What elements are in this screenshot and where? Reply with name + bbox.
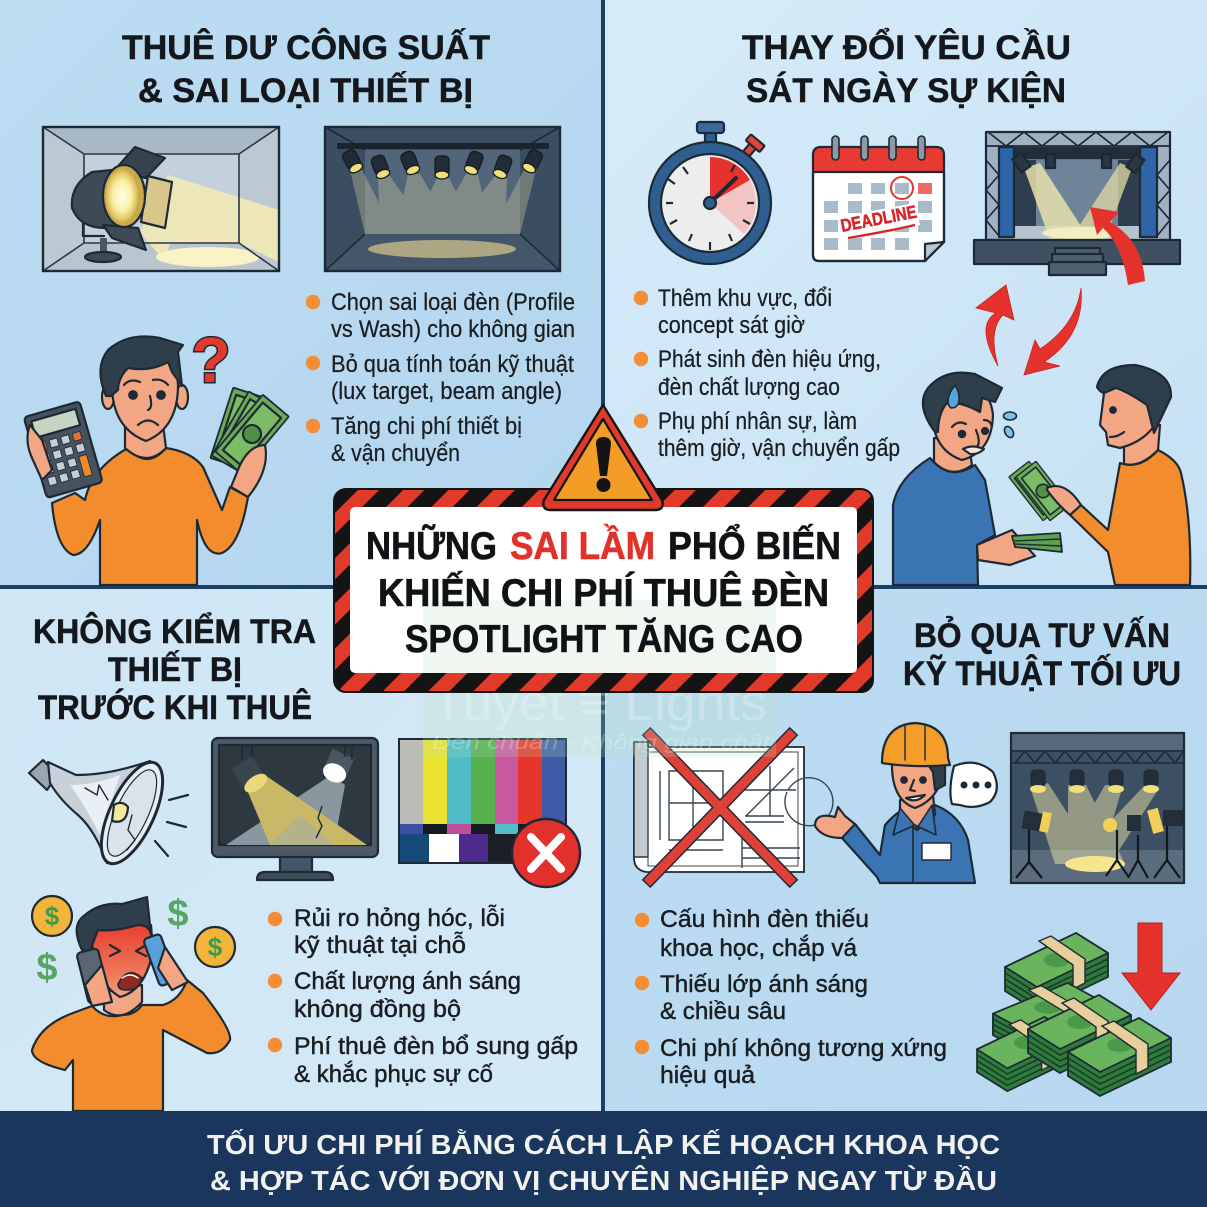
icon: single spotlight in room	[43, 127, 279, 271]
illustration: stressed man on two phones with coins: $	[167, 893, 189, 935]
heading: bottom left: KHÔNG KIỂM TRA	[33, 612, 316, 651]
icon: monitor with mismatched beams	[212, 738, 378, 880]
title text: KHIẾN CHI PHÍ THUÊ ĐÈN	[378, 571, 829, 615]
panel: oversized equipment background	[0, 0, 604, 588]
title text: PHỔ BIẾN	[668, 523, 841, 568]
bullets: bottom right: Cấu hình đèn thiếu	[660, 906, 869, 933]
bullets: top right: Phụ phí nhân sự, làm	[658, 408, 857, 435]
icon: stopwatch	[649, 122, 771, 264]
title text: NHỮNG	[366, 524, 497, 568]
illustration: worried client hands over money	[893, 365, 1190, 585]
arrow: up left	[976, 285, 1014, 366]
white title box	[350, 507, 857, 673]
illustration: technician in hard hat	[815, 723, 997, 883]
illustration: stressed man on two phones with coins: $	[208, 932, 223, 962]
bullets: bottom right: hiệu quả	[660, 1062, 755, 1089]
panel: late changes background	[604, 0, 1207, 588]
heading: bottom right: BỎ QUA TƯ VẤN	[914, 617, 1170, 655]
watermark panel: Đèn chuẩn - Không gian chất	[432, 732, 772, 754]
icon: question mark: ?	[191, 324, 231, 396]
bullets: bottom left: không đồng bộ	[294, 996, 461, 1023]
heading: top left	[122, 28, 490, 110]
watermark tint on title box	[423, 600, 776, 673]
bullets: top left: vs Wash) cho không gian	[331, 316, 575, 343]
icon: patchwork stage lighting	[1011, 733, 1184, 883]
heading: top right	[742, 29, 1071, 110]
illustration: confused man with calculator and money	[24, 336, 289, 585]
bullets: bottom right	[635, 906, 947, 1089]
heading: bottom left: THIẾT BỊ	[108, 651, 242, 689]
heading: top left: THUÊ DƯ CÔNG SUẤT	[122, 28, 490, 67]
illustration: stressed man on two phones with coins: $	[45, 901, 60, 931]
icon: row of spotlights on dark stage	[325, 127, 560, 271]
icon: crossed-out blueprint	[634, 731, 833, 884]
bullets: bottom right: khoa học, chắp vá	[660, 935, 857, 962]
title text	[366, 523, 841, 661]
watermark panel	[423, 600, 776, 757]
heading: bottom left: TRƯỚC KHI THUÊ	[38, 689, 312, 727]
icon: cracked bulb	[29, 754, 188, 872]
watermark panel: Tuyết ≡ Lights	[432, 674, 767, 732]
heading: top right: THAY ĐỔI YÊU CẦU	[742, 29, 1071, 67]
bullets: top right: Phát sinh đèn hiệu ứng,	[658, 346, 881, 373]
title text: SPOTLIGHT TĂNG CAO	[405, 617, 803, 661]
bullets: top left: Chọn sai loại đèn (Profile	[331, 289, 575, 316]
bullets: top right: thêm giờ, vận chuyển gấp	[658, 435, 900, 462]
icon: warning triangle	[543, 405, 663, 510]
icon: sweat drops	[1003, 412, 1016, 439]
icon: stage with truss	[974, 132, 1180, 285]
title text: SAI LẦM	[510, 524, 655, 568]
bullets: bottom left: & khắc phục sự cố	[294, 1061, 493, 1088]
panel: no equipment check background	[0, 588, 604, 1112]
bullets: top right: concept sát giờ	[658, 312, 805, 339]
bullets: top left: (lux target, beam angle)	[331, 378, 562, 405]
central title banner	[334, 489, 873, 692]
heading: bottom left	[33, 612, 316, 727]
footer banner: TỐI ƯU CHI PHÍ BẰNG CÁCH LẬP KẾ HOẠCH KHOA HỌC	[207, 1128, 1000, 1160]
illustration: stressed man on two phones with coins: $	[36, 947, 58, 989]
bullets: top right: Thêm khu vực, đổi	[658, 285, 832, 312]
bullets: top left: & vận chuyển	[331, 440, 460, 467]
heading: bottom right	[903, 617, 1181, 693]
hazard striped frame	[334, 489, 873, 692]
bullets: bottom left: Rủi ro hỏng hóc, lỗi	[294, 905, 505, 932]
heading: top left: & SAI LOẠI THIẾT BỊ	[138, 72, 473, 110]
bullets: bottom left: Chất lượng ánh sáng	[294, 968, 521, 995]
bullets: bottom left: Phí thuê đèn bổ sung gấp	[294, 1033, 578, 1060]
illustration: stressed man on two phones with coins	[32, 893, 235, 1111]
footer banner: & HỢP TÁC VỚI ĐƠN VỊ CHUYÊN NGHIỆP NGAY TỪ ĐẦU	[210, 1165, 997, 1196]
icon: calendar with deadline	[813, 136, 944, 261]
heading: bottom right: KỸ THUẬT TỐI ƯU	[903, 654, 1181, 693]
icon: money stacks	[977, 933, 1171, 1096]
bullets: top left: Tăng chi phí thiết bị	[331, 413, 522, 440]
bullets: bottom left: kỹ thuật tại chỗ	[294, 932, 466, 959]
bullets: top left: Bỏ qua tính toán kỹ thuật	[331, 351, 574, 378]
bullets: bottom left	[268, 905, 578, 1088]
bullets: top right: đèn chất lượng cao	[658, 374, 840, 401]
footer banner	[0, 1111, 1207, 1207]
bullets: bottom right: Chi phí không tương xứng	[660, 1035, 947, 1062]
arrow: down right	[1024, 288, 1081, 375]
arrow: cost down	[1122, 923, 1180, 1010]
icon: calendar with deadline: DEADLINE	[839, 202, 918, 236]
bullets: top right	[634, 285, 900, 462]
icon: colour test bars with error badge	[399, 739, 580, 887]
bullets: top left	[306, 289, 575, 467]
bullets: bottom right: & chiều sâu	[660, 998, 786, 1025]
bullets: bottom right: Thiếu lớp ánh sáng	[660, 971, 868, 998]
heading: top right: SÁT NGÀY SỰ KIỆN	[746, 72, 1066, 110]
panel: skipped consulting background	[604, 588, 1207, 1112]
